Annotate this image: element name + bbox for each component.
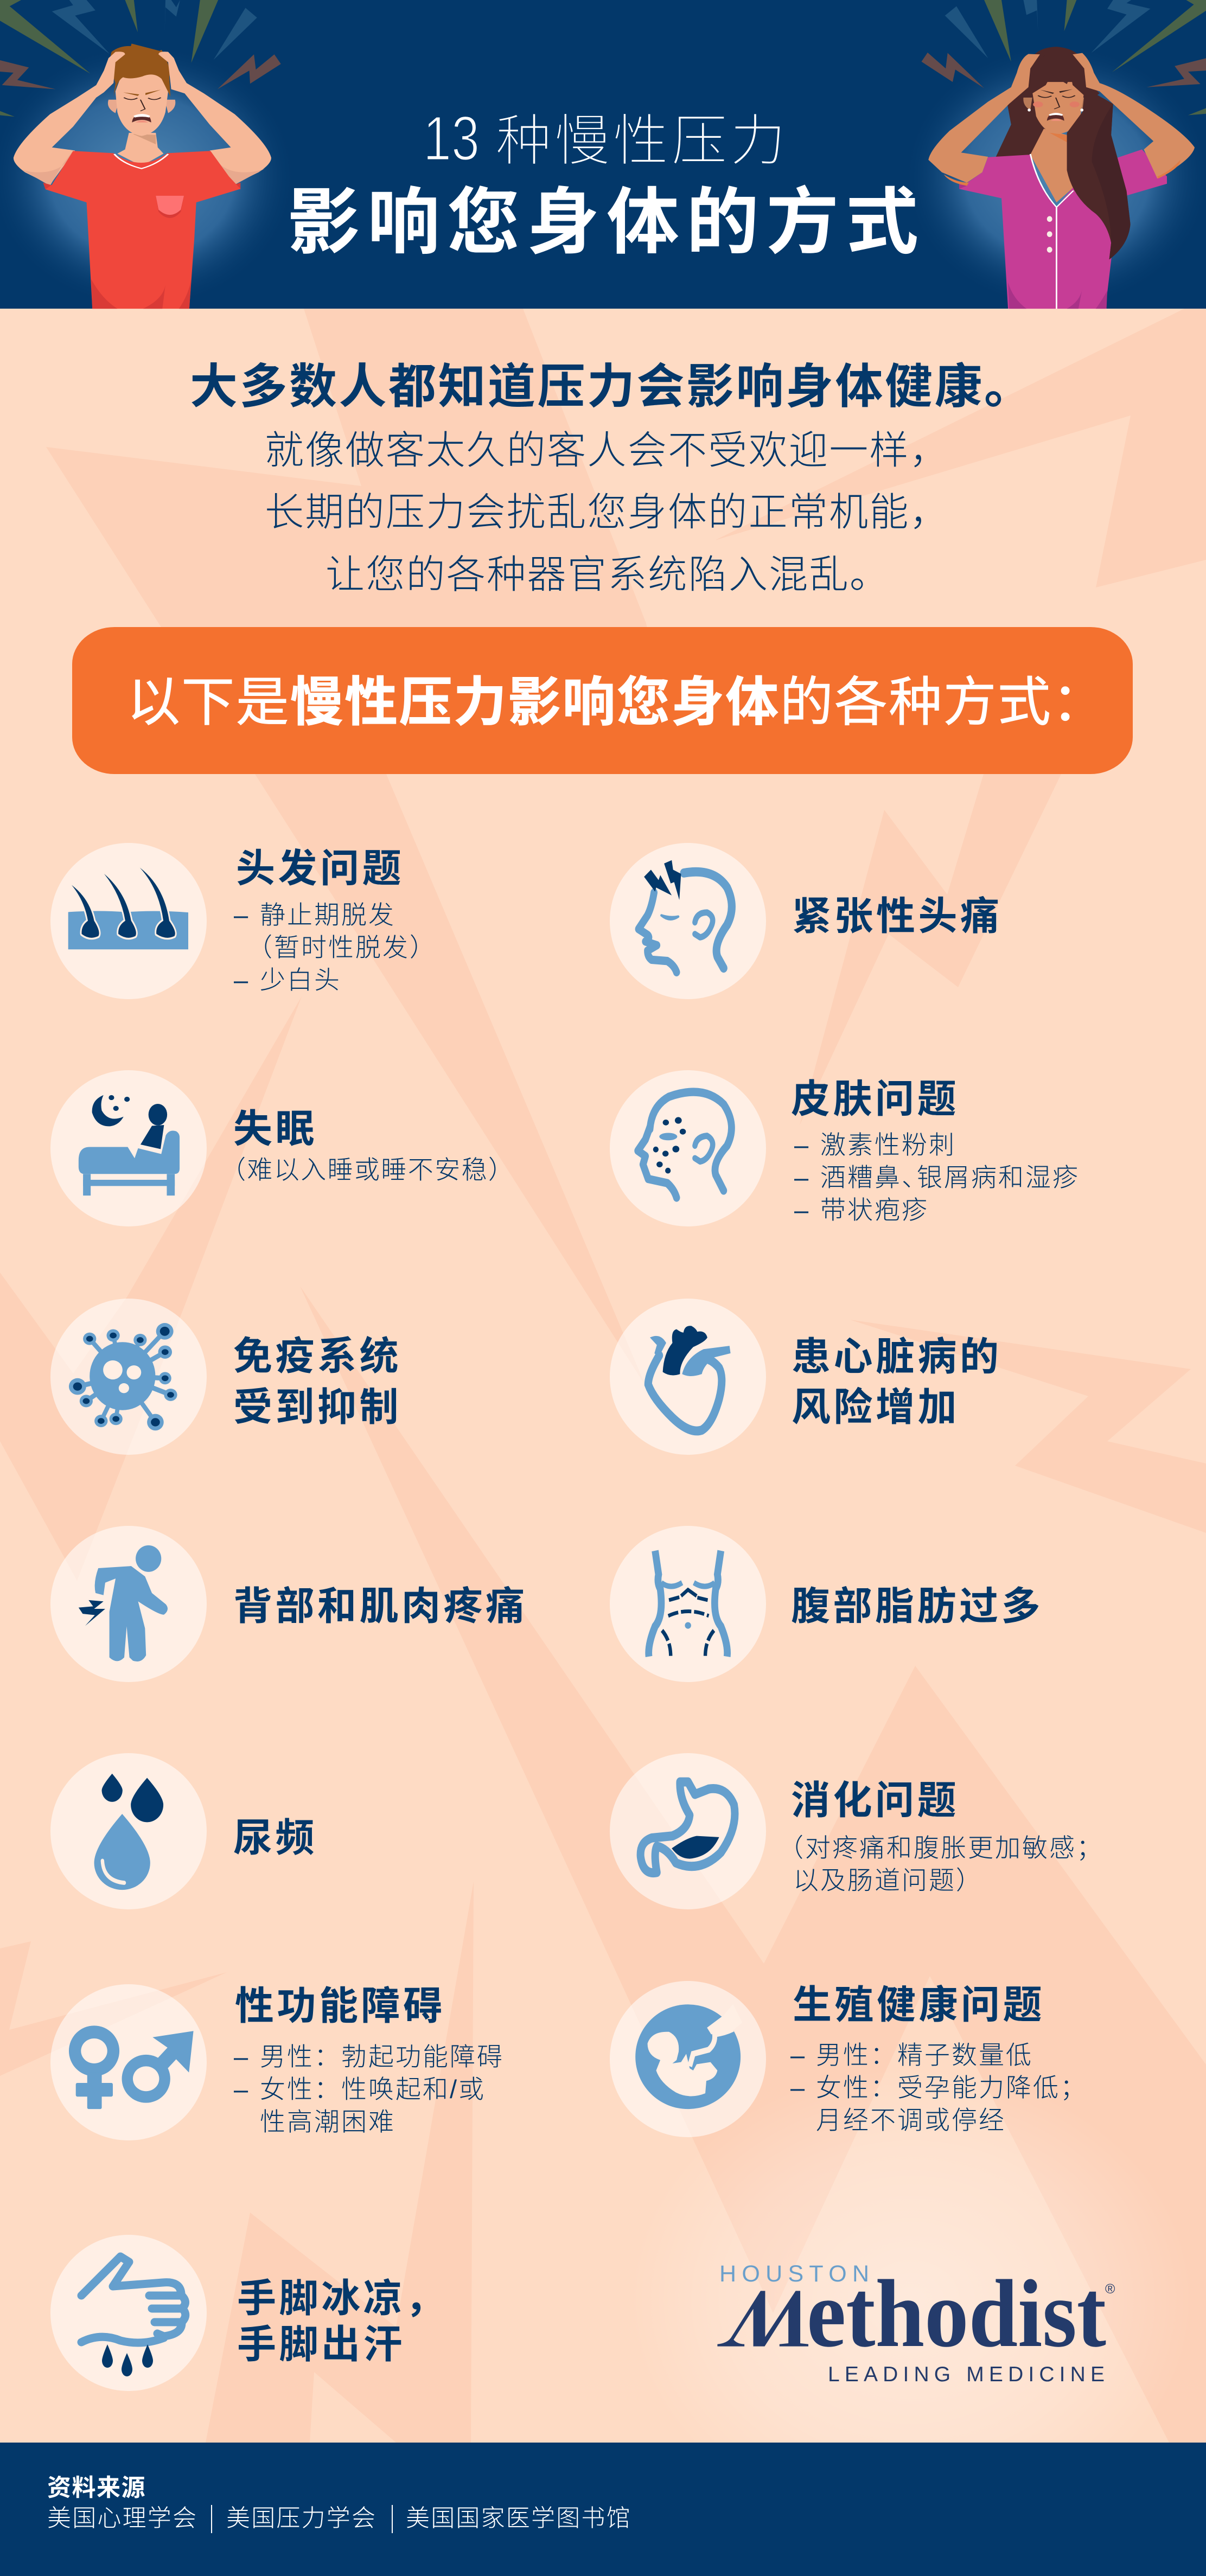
icon: hand with sweat drops bbox=[81, 2257, 186, 2376]
header band bbox=[0, 0, 1206, 309]
heading: frequent urination: 尿频 bbox=[233, 1817, 317, 1860]
item: hair problems bbox=[50, 843, 437, 999]
item: digestive problems bbox=[610, 1753, 1103, 1909]
logo: Houston Methodist: HOUSTON bbox=[719, 2261, 869, 2287]
list: hair problems: 少白头 bbox=[260, 966, 341, 994]
icon: head with lightning bbox=[639, 860, 732, 972]
item: back and muscle pain bbox=[50, 1526, 528, 1682]
icon: drops bbox=[94, 1774, 163, 1890]
banner text: 以下是慢性压力影响您身体的各种方式： bbox=[127, 672, 1106, 732]
sources list: 美国压力学会 bbox=[226, 2505, 377, 2532]
list: skin problems: 酒糟鼻、银屑病和湿疹 bbox=[820, 1163, 1080, 1192]
list: hair problems: – bbox=[234, 966, 250, 994]
icon: stomach bbox=[641, 1782, 735, 1873]
icon: gender symbols bbox=[69, 2025, 194, 2109]
list: sexual dysfunction: 女性：性唤起和/或 bbox=[260, 2075, 486, 2104]
icon: virus bbox=[69, 1323, 177, 1430]
orange banner bbox=[72, 627, 1133, 774]
note: digestive problems: 以及肠道问题） bbox=[793, 1866, 983, 1895]
list: skin problems: – bbox=[794, 1130, 810, 1159]
list: hair problems: 静止期脱发 bbox=[260, 900, 395, 929]
footer band bbox=[0, 2443, 1206, 2576]
sources list bbox=[47, 2505, 631, 2533]
sources list: 美国国家医学图书馆 bbox=[406, 2505, 631, 2532]
item: insomnia bbox=[50, 1070, 515, 1226]
heading: excess belly fat: 腹部脂肪过多 bbox=[791, 1585, 1043, 1628]
logo: Houston Methodist: ® bbox=[1105, 2281, 1115, 2297]
list: sexual dysfunction: – bbox=[234, 2042, 250, 2071]
title line 1: 种慢性压力 bbox=[496, 110, 789, 172]
list: hair problems: （暂时性脱发） bbox=[247, 933, 437, 962]
heading: heart disease risk: 风险增加 bbox=[792, 1386, 960, 1429]
intro headline: 大多数人都知道压力会影响身体健康。 bbox=[190, 360, 1034, 413]
sources heading: 资料来源 bbox=[47, 2475, 146, 2501]
item: skin problems bbox=[610, 1070, 1080, 1226]
intro body line 1: 就像做客太久的客人会不受欢迎一样， bbox=[265, 429, 950, 472]
icon: head with blemishes bbox=[638, 1092, 731, 1198]
list: skin problems: – bbox=[794, 1196, 810, 1224]
title line 2: 影响您身体的方式 bbox=[288, 182, 926, 263]
list: skin problems: – bbox=[794, 1163, 810, 1192]
list: reproductive health problems bbox=[790, 2041, 1087, 2134]
item: heart disease risk bbox=[610, 1299, 1002, 1455]
icon: heart bbox=[648, 1326, 731, 1431]
heading: back and muscle pain: 背部和肌肉疼痛 bbox=[233, 1585, 528, 1628]
item: reproductive health problems bbox=[610, 1981, 1087, 2137]
list: skin problems: 激素性粉刺 bbox=[820, 1130, 956, 1159]
heading: insomnia: 失眠 bbox=[233, 1108, 317, 1151]
list: reproductive health problems: – bbox=[790, 2073, 806, 2102]
list: reproductive health problems: – bbox=[790, 2041, 806, 2069]
item: frequent urination bbox=[50, 1753, 317, 1909]
note: insomnia: （难以入睡或睡不安稳） bbox=[220, 1155, 515, 1184]
heading: heart disease risk: 患心脏病的 bbox=[792, 1335, 1002, 1379]
list: skin problems: 带状疱疹 bbox=[820, 1196, 929, 1224]
logo: Houston Methodist bbox=[717, 2260, 1115, 2386]
heading: cold hands and sweaty feet: 手脚冰凉， bbox=[237, 2277, 448, 2321]
heading: digestive problems: 消化问题 bbox=[791, 1779, 959, 1823]
title line 1: 13 bbox=[423, 103, 480, 174]
illustration: stressed man bbox=[0, 0, 296, 309]
heading: suppressed immune system: 受到抑制 bbox=[233, 1386, 401, 1429]
icon: person awake in bed bbox=[79, 1095, 180, 1196]
sources list: 美国心理学会 bbox=[47, 2505, 197, 2532]
heading: cold hands and sweaty feet: 手脚出汗 bbox=[237, 2323, 405, 2367]
note: digestive problems bbox=[778, 1833, 1103, 1895]
illustration: stressed woman bbox=[903, 0, 1206, 309]
intro body line 3: 让您的各种器官系统陷入混乱。 bbox=[326, 553, 890, 597]
heading: suppressed immune system: 免疫系统 bbox=[233, 1335, 401, 1378]
list: hair problems: – bbox=[234, 900, 250, 929]
icon: fetus in womb bbox=[635, 2004, 742, 2109]
list: skin problems bbox=[794, 1130, 1080, 1224]
list: sexual dysfunction: 男性：勃起功能障碍 bbox=[260, 2042, 504, 2071]
item: tension headache bbox=[610, 843, 1003, 999]
heading: skin problems: 皮肤问题 bbox=[791, 1078, 959, 1121]
list: sexual dysfunction bbox=[234, 2042, 504, 2136]
icon: person with back pain bbox=[79, 1545, 168, 1661]
item: cold hands and sweaty feet bbox=[50, 2235, 448, 2391]
item: excess belly fat bbox=[610, 1526, 1043, 1682]
list: sexual dysfunction: – bbox=[234, 2075, 250, 2104]
heading: reproductive health problems: 生殖健康问题 bbox=[793, 1984, 1045, 2027]
note: digestive problems: （对疼痛和腹胀更加敏感； bbox=[778, 1833, 1103, 1862]
heading: hair problems: 头发问题 bbox=[236, 847, 404, 891]
logo: Houston Methodist: LEADING MEDICINE bbox=[828, 2363, 1105, 2386]
item: sexual dysfunction bbox=[50, 1984, 504, 2140]
list: sexual dysfunction: 性高潮困难 bbox=[260, 2107, 395, 2136]
list: reproductive health problems: 月经不调或停经 bbox=[816, 2106, 1006, 2134]
list: reproductive health problems: 女性：受孕能力降低； bbox=[816, 2073, 1087, 2102]
icon: torso bbox=[649, 1551, 728, 1657]
heading: sexual dysfunction: 性功能障碍 bbox=[235, 1985, 445, 2028]
heading: tension headache: 紧张性头痛 bbox=[792, 895, 1003, 938]
list: reproductive health problems: 男性：精子数量低 bbox=[816, 2041, 1033, 2069]
item: suppressed immune system bbox=[50, 1299, 401, 1455]
icon: hair follicles bbox=[68, 867, 188, 949]
logo: Houston Methodist: ethodist bbox=[807, 2260, 1106, 2367]
list: hair problems bbox=[234, 900, 437, 994]
intro text block bbox=[190, 360, 1034, 597]
intro body line 2: 长期的压力会扰乱您身体的正常机能， bbox=[265, 491, 950, 534]
